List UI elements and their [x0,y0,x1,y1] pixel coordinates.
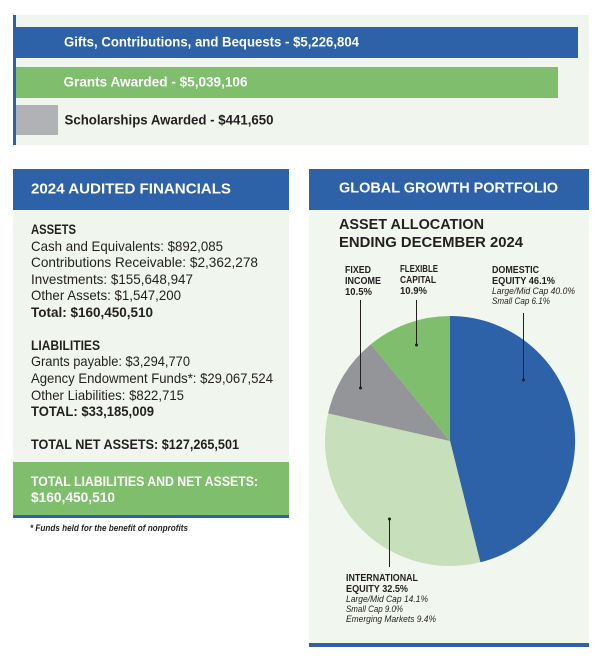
heading: global growth portfolio [309,169,589,210]
label: fixed income: INCOME [345,276,381,287]
label: fixed income [345,265,381,390]
text block: liabilities: Other Liabilities: $822,715 [31,387,184,403]
heading: global growth portfolio: GLOBAL GROWTH PORTFOLIO [339,180,558,196]
label: flexible capital: FLEXIBLE [400,264,438,275]
text block: assets: Contributions Receivable: $2,362,278 [31,254,258,270]
label: international equity: INTERNATIONAL [346,573,418,584]
text block: liabilities [31,338,273,419]
bar: gifts, contributions and bequests: Gifts, Contributions, and Bequests - $5,226,804 [64,34,359,50]
heading: asset allocation: ASSET ALLOCATION [339,216,484,233]
bar: gifts, contributions and bequests [15,27,578,58]
slice: flexible capital [371,316,450,441]
heading: audited financials [13,169,289,210]
bar: scholarships awarded: Scholarships Awarded - $441,650 [64,112,274,128]
panel: 2024 audited financials [13,169,289,518]
label: fixed income: 10.5% [345,287,372,298]
heading: audited financials: 2024 AUDITED FINANCIALS [31,180,231,198]
callout: total liabilities and net assets: $160,450,510 [31,490,115,505]
label: flexible capital: CAPITAL [400,275,436,286]
text block: liabilities: TOTAL: $33,185,009 [31,404,154,419]
text block: assets [31,222,258,320]
bar: grants awarded [16,67,558,98]
label: international equity: Emerging Markets 9.4% [346,614,436,624]
callout: total liabilities and net assets: TOTAL LIABILITIES AND NET ASSETS: [31,474,258,489]
label: international equity: Large/Mid Cap 14.1% [346,594,428,604]
panel: top bar chart [13,15,589,145]
callout: total liabilities and net assets [13,462,289,518]
text block: liabilities: LIABILITIES [31,338,100,353]
footnote: * Funds held for the benefit of nonprofits [30,523,188,533]
label: domestic equity: Small Cap 6.1% [492,296,550,306]
pie chart [325,316,575,566]
label: domestic equity: Large/Mid Cap 40.0% [492,286,575,296]
text block: liabilities: Agency Endowment Funds*: $29,067,524 [31,370,273,386]
label: domestic equity [492,265,575,382]
text block: assets: ASSETS [31,222,76,237]
label: domestic equity: EQUITY 46.1% [492,276,555,287]
text block: liabilities: Grants payable: $3,294,770 [31,353,190,369]
text: total net assets: TOTAL NET ASSETS: $127,265,501 [31,437,239,452]
text block: assets: Cash and Equivalents: $892,085 [31,238,223,254]
label: international equity: EQUITY 32.5% [346,584,408,595]
label: domestic equity: DOMESTIC [492,265,539,276]
slice: international equity [325,413,480,566]
bar: grants awarded: Grants Awarded - $5,039,106 [64,74,248,90]
text block: assets: Investments: $155,648,947 [31,271,193,287]
label: international equity [346,518,436,624]
slice: fixed income [328,344,450,441]
label: flexible capital: 10.9% [400,286,427,297]
slice: domestic equity [450,316,575,562]
label: flexible capital [400,264,438,346]
panel: global growth portfolio [309,169,589,647]
text block: assets: Total: $160,450,510 [31,305,153,320]
heading: asset allocation [339,216,524,251]
label: fixed income: FIXED [345,265,371,276]
heading: asset allocation: ENDING DECEMBER 2024 [339,234,524,251]
label: international equity: Small Cap 9.0% [346,604,403,614]
bar: scholarships awarded [16,105,274,135]
text block: assets: Other Assets: $1,547,200 [31,287,181,303]
